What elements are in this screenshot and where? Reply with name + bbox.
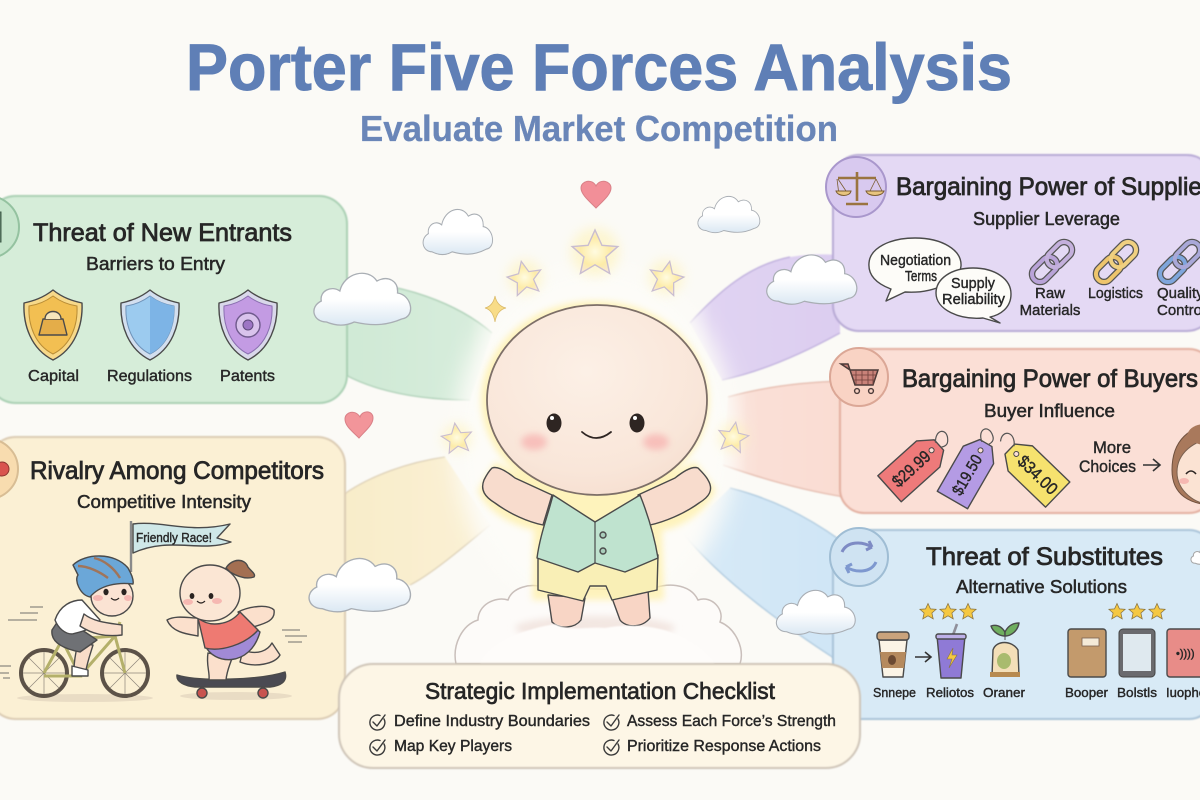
icon: regulations shield	[121, 290, 179, 360]
star: left	[440, 421, 474, 454]
glow	[478, 301, 716, 600]
left arm	[483, 467, 552, 525]
checklist item: Map Key Players	[394, 738, 512, 755]
heading: Strategic Implementation Checklist	[425, 678, 776, 704]
checklist item: Prioritize Response Actions	[627, 738, 821, 755]
icon: tablet	[1119, 629, 1155, 677]
speech bubble: negotiation terms: Terms	[905, 269, 937, 285]
cloud: top left	[423, 209, 493, 254]
tank top	[198, 612, 258, 649]
icon: chain gold	[1093, 239, 1139, 285]
star: top centre	[572, 230, 618, 273]
stars around character	[440, 228, 751, 454]
vest buttons	[600, 532, 606, 538]
substitute labels: Reliotos	[926, 685, 975, 700]
price tag: red: $29.99	[888, 447, 935, 491]
icon: book	[1068, 629, 1106, 677]
panel background	[0, 437, 345, 719]
icon: swap arrows	[830, 528, 888, 586]
panel: bargaining power of suppliers	[826, 155, 1200, 331]
speech bubble: supply reliability	[936, 268, 1011, 323]
icon: chain blue	[1157, 239, 1200, 285]
heading: Threat of Substitutes	[926, 543, 1163, 571]
shorts	[205, 625, 260, 660]
heart: left	[345, 412, 373, 438]
heading: Threat of New Entrants	[33, 219, 292, 247]
rating stars: left	[920, 604, 976, 619]
arms	[167, 617, 198, 636]
subtitle: Evaluate Market Competition	[360, 108, 838, 149]
speed lines	[282, 630, 307, 642]
icon: chain purple	[1029, 239, 1075, 285]
label: capital: Capital	[28, 368, 79, 385]
panel background	[840, 349, 1200, 513]
icon: shopping cart	[830, 348, 888, 406]
clouds	[309, 196, 857, 634]
icon: coffee cup	[877, 632, 909, 677]
panel: threat of substitutes	[830, 528, 1200, 719]
label: logistics: Logistics	[1088, 285, 1143, 302]
ribbon: rivalry	[340, 457, 490, 592]
panel: threat of new entrants	[0, 196, 347, 403]
eyes	[546, 414, 562, 432]
ribbon: new entrants	[340, 283, 492, 400]
panel background	[339, 664, 860, 768]
ribbon edge: new entrants	[340, 283, 492, 400]
checklist item: Define Industry Boundaries	[394, 713, 590, 730]
ribbon edge: suppliers	[690, 257, 840, 380]
ponytail	[226, 560, 255, 578]
substitute labels: Oraner	[983, 685, 1026, 700]
price tag: purple: $19.50	[949, 452, 986, 499]
label: raw materials: Raw	[1035, 285, 1065, 302]
icon: badge	[0, 196, 19, 258]
icon: drink cup	[936, 624, 966, 678]
icon: scales	[826, 157, 886, 217]
price tag: purple	[937, 423, 1007, 509]
label: patents: Patents	[220, 368, 275, 385]
substitute labels	[873, 685, 1200, 700]
cloud pedestal	[455, 585, 741, 664]
panel: strategic implementation checklist	[339, 664, 860, 768]
label: raw materials: Materials	[1020, 302, 1080, 319]
panel background	[833, 530, 1200, 719]
head	[487, 305, 707, 495]
ribbon: suppliers	[690, 254, 840, 380]
icon: audio book	[1167, 629, 1200, 677]
ground shadow	[17, 694, 153, 702]
cloud: left lower	[309, 558, 410, 612]
flag: friendly race	[131, 521, 231, 572]
subheading: Buyer Influence	[984, 401, 1115, 421]
skateboard	[177, 672, 286, 687]
ribbon edge: substitutes	[683, 488, 840, 662]
icon: patents shield	[219, 290, 277, 360]
speech bubble: supply reliability: Supply	[951, 276, 996, 292]
panel: rivalry among competitors	[0, 437, 345, 719]
text: more choices: Choices	[1079, 457, 1136, 476]
flag: friendly race: Friendly Race!	[136, 530, 212, 545]
speed lines	[0, 607, 43, 678]
ribbon: substitutes	[683, 488, 840, 662]
star: right	[716, 420, 751, 453]
subheading: Barriers to Entry	[86, 254, 225, 274]
character	[478, 301, 716, 627]
label: regulations: Regulations	[107, 368, 192, 385]
vest	[537, 495, 658, 572]
title: Porter Five Forces Analysis	[186, 30, 1012, 104]
cloud: right upper	[767, 255, 857, 304]
panel background	[833, 155, 1200, 331]
text: more choices: More	[1093, 438, 1131, 457]
speech bubble: negotiation terms	[869, 238, 961, 301]
right arm	[638, 467, 711, 525]
substitute labels: Booper	[1065, 685, 1109, 700]
subheading: Competitive Intensity	[77, 492, 251, 512]
white halo behind character	[455, 265, 735, 615]
ribbon edge: rivalry	[340, 457, 490, 585]
illustration: cyclist	[0, 556, 153, 702]
cloud: left upper	[314, 273, 411, 325]
ribbon: buyers	[723, 381, 845, 497]
heart: top	[581, 181, 611, 208]
star: upper right	[646, 258, 686, 297]
shorts	[538, 555, 658, 601]
speech bubble: supply reliability: Reliability	[942, 292, 1006, 308]
panel: bargaining power of buyers	[830, 348, 1200, 513]
substitute labels: Snnepe	[873, 685, 916, 700]
star glow	[443, 228, 747, 452]
legs	[548, 595, 585, 627]
wheels	[21, 650, 148, 696]
cloud: top right	[698, 196, 760, 233]
icon: badge	[0, 439, 18, 499]
ground shadow	[180, 692, 292, 700]
star: upper left	[505, 258, 545, 297]
back leg	[240, 643, 280, 665]
subheading: Supplier Leverage	[973, 209, 1120, 229]
icon: plant	[990, 623, 1020, 677]
arrow: coffee to drink	[915, 652, 931, 662]
subheading: Alternative Solutions	[956, 577, 1127, 597]
price tag: red	[878, 423, 960, 502]
icon: capital shield	[24, 290, 82, 360]
price tag: yellow	[988, 426, 1070, 507]
rider	[74, 643, 93, 670]
heading: Rivalry Among Competitors	[30, 457, 324, 485]
connector ribbons to centre	[340, 254, 845, 662]
ribbon edge: buyers	[723, 381, 845, 497]
panel background	[0, 196, 347, 403]
blush	[521, 434, 547, 450]
text: more choices	[1079, 438, 1160, 476]
rating stars: right	[1109, 604, 1165, 619]
pedestal front puffs	[480, 624, 715, 664]
sparkle	[485, 296, 506, 322]
illustration: skater	[167, 560, 307, 700]
checklist item: Assess Each Force’s Strength	[627, 713, 836, 730]
frame	[44, 622, 125, 676]
illustration: buyer face	[1172, 424, 1200, 505]
price tag: yellow: $34.00	[1014, 452, 1061, 499]
cloud: panel corner	[1191, 546, 1200, 564]
front leg	[207, 653, 232, 680]
head	[180, 565, 240, 621]
substitute labels: Bolstls	[1117, 685, 1158, 700]
smile	[582, 432, 611, 438]
icon: audio book: •))))	[1176, 648, 1195, 660]
cloud: right lower	[776, 590, 855, 634]
speech bubble: negotiation terms: Negotiation	[880, 253, 951, 269]
